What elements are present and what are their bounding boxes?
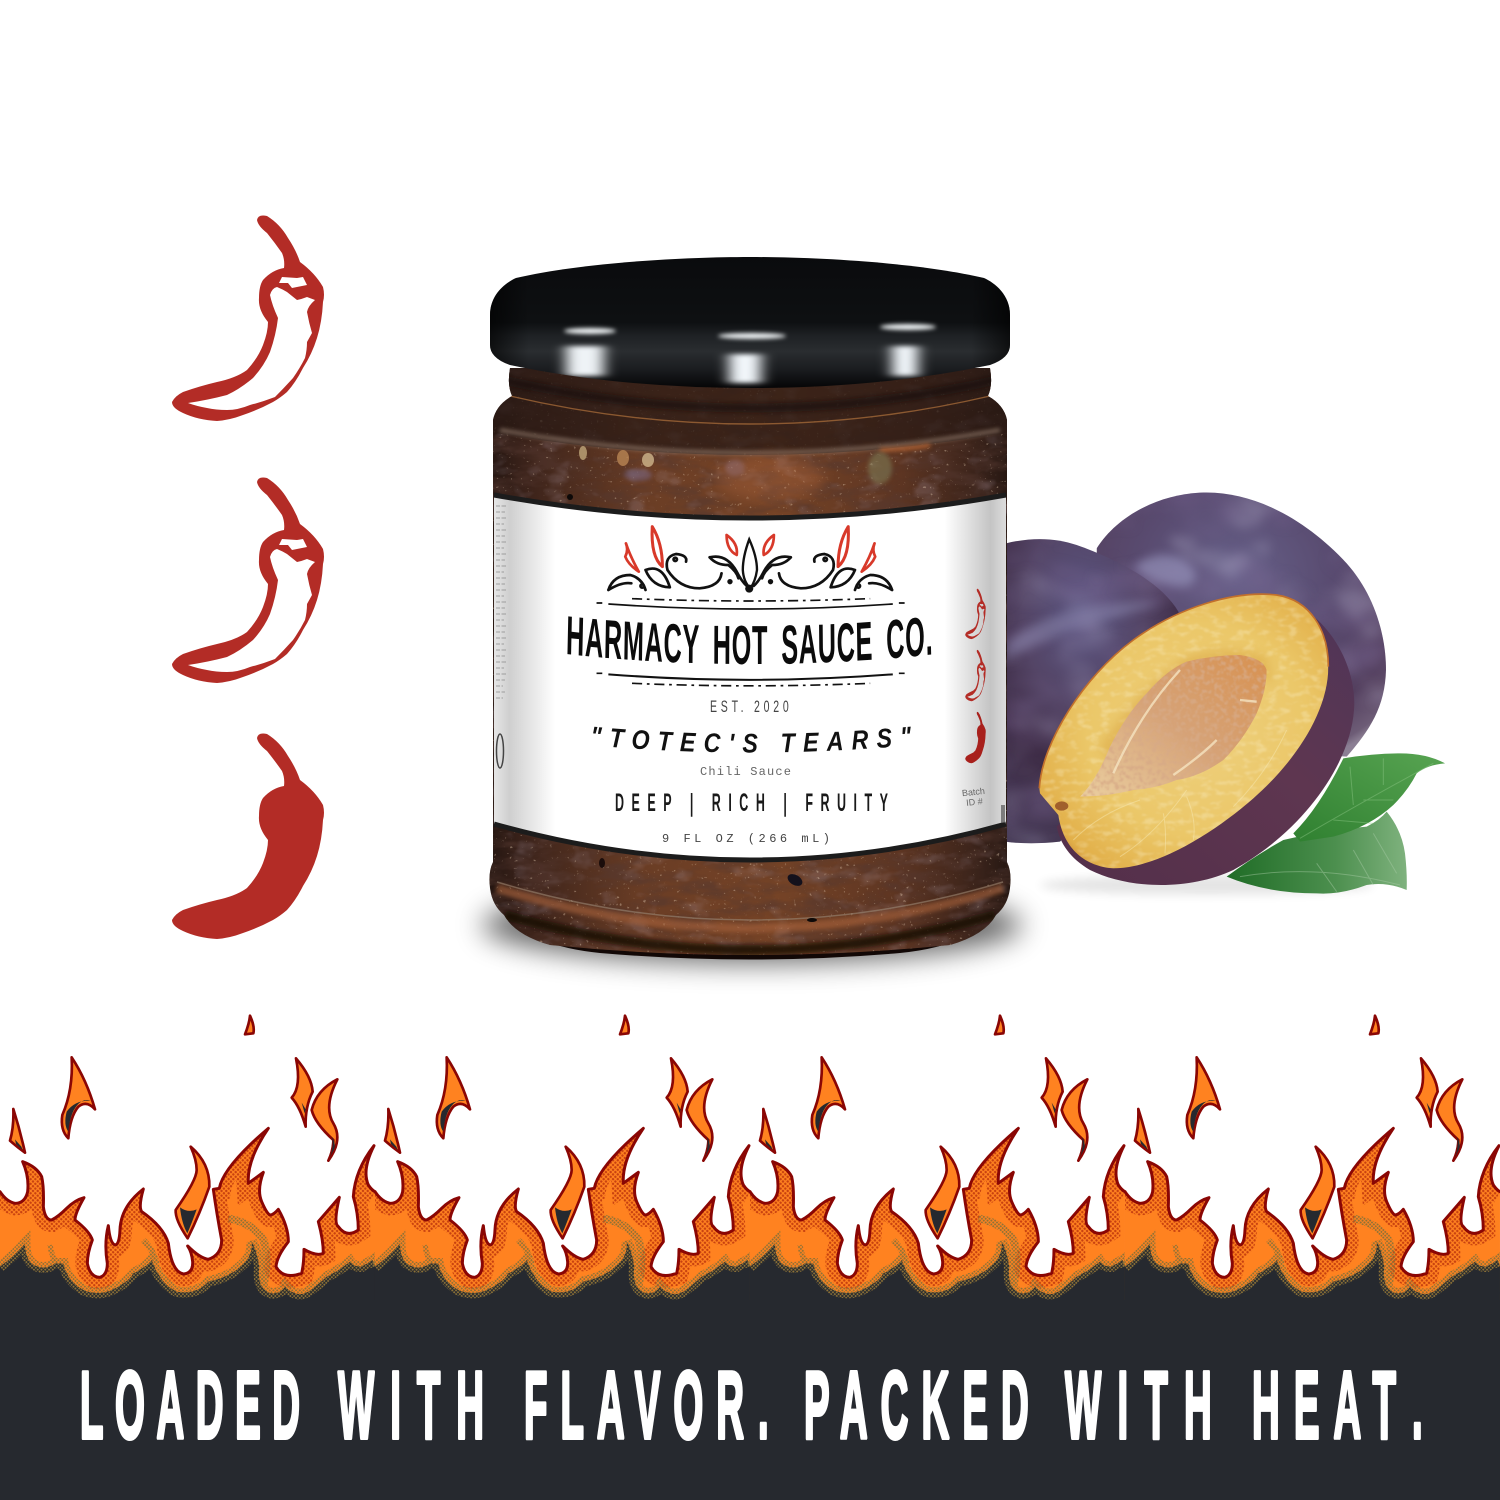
plum stem dimple [1055, 801, 1068, 811]
lid upper highlights [564, 328, 616, 334]
flavour descriptors: DEEP | RICH | FRUITY [615, 789, 888, 817]
brand name [567, 616, 932, 664]
label top border [494, 495, 1006, 518]
icon: filled chili pepper, active heat level [172, 734, 324, 939]
dark chunks [788, 874, 802, 886]
neck ring [495, 378, 1005, 408]
lilac flecks [624, 469, 652, 481]
lid lower highlights [566, 346, 604, 376]
lilac blotches [493, 434, 1008, 954]
tagline: PACKED [804, 1353, 1029, 1459]
tagline: FLAVOR [524, 1353, 744, 1459]
product name: "TOTEC'S TEARS" [593, 726, 911, 753]
tagline: WITH [338, 1353, 484, 1459]
product type: Chili Sauce [700, 765, 791, 779]
tagline: LOADED [80, 1353, 300, 1459]
shoulder glass highlight [500, 430, 1000, 453]
dark footer band [0, 1300, 1500, 1500]
illustration: plums and leaves [1003, 487, 1445, 895]
jar label [494, 492, 1006, 862]
jar dark base [503, 905, 997, 960]
plum back right [1093, 487, 1393, 763]
plum flesh fibres [1073, 730, 1287, 857]
plum half skin [1057, 613, 1354, 885]
rim underside [505, 915, 995, 950]
label ornament with red flames [597, 527, 905, 686]
right side fine print [1001, 805, 1005, 823]
warm glow [715, 456, 825, 500]
sauce mottling [480, 360, 1020, 970]
product name [593, 726, 911, 753]
plum half rim [1039, 594, 1328, 788]
jar sauce body [480, 360, 1020, 970]
plum back left [1007, 539, 1178, 844]
batch id: ID # [966, 796, 983, 808]
flames band [0, 1016, 1500, 1500]
shoulder groove [510, 396, 990, 424]
shoulder dark glass [490, 360, 1010, 455]
tagline: WITH [1065, 1353, 1212, 1459]
icon: outlined chili pepper, middle heat level [172, 478, 324, 683]
flesh shading around stone [1100, 650, 1273, 767]
plum stone [1077, 652, 1270, 800]
rim thin line [497, 882, 1003, 920]
jar lid [490, 257, 1010, 388]
label bottom border [494, 824, 1006, 860]
jar shadow [482, 887, 1022, 963]
batch id [961, 786, 986, 808]
batch id: Batch [961, 786, 985, 798]
tagline: HEAT [1252, 1353, 1396, 1459]
established date: EST. 2020 [710, 696, 789, 716]
plum soft shadow [1040, 875, 1373, 895]
volume: 9 FL OZ (266 mL) [662, 832, 830, 846]
pale seeds [579, 446, 587, 460]
leaf upper [1293, 753, 1445, 842]
copper reflection [880, 445, 930, 450]
plum half flesh [1033, 587, 1333, 873]
brand name: HARMACY HOT SAUCE CO. [567, 616, 932, 664]
ornamental rules [597, 599, 905, 686]
leaf lower [1227, 812, 1407, 894]
sauce specks [480, 360, 1020, 970]
tagline: . [1412, 1353, 1423, 1459]
icon: small heat peppers [965, 589, 986, 763]
tagline [80, 1353, 1423, 1459]
tagline: . [758, 1353, 769, 1459]
lower copper rim [497, 888, 1003, 928]
pale chunk [868, 452, 892, 484]
label paper [494, 495, 1006, 860]
icon: recycling mark [496, 734, 504, 768]
icon: outlined chili pepper, top heat level [172, 216, 324, 421]
left side fine print [496, 506, 506, 698]
